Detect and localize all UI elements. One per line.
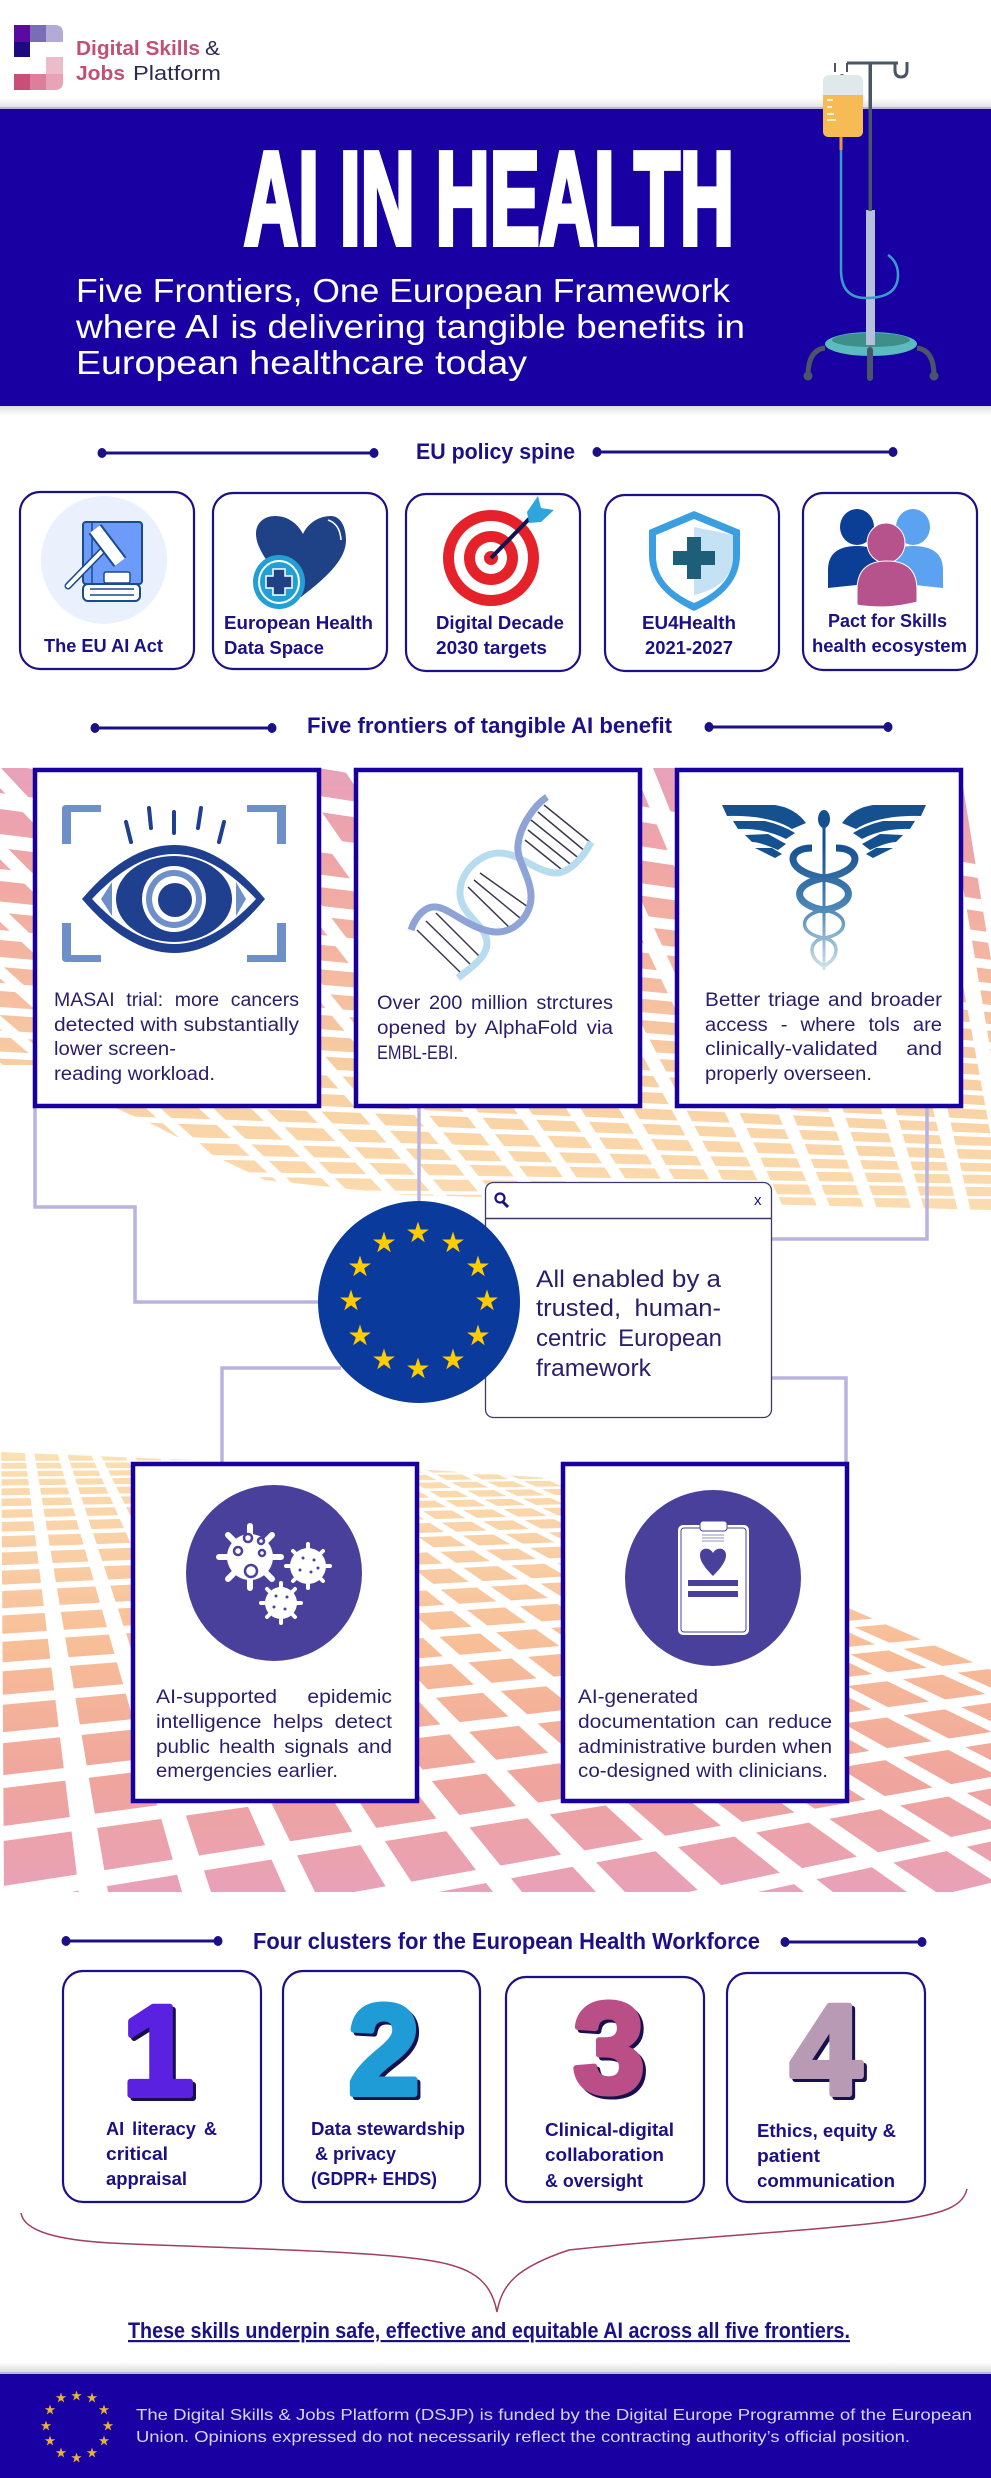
label: Pact for Skills bbox=[828, 610, 947, 631]
panel: triage and access bbox=[677, 770, 961, 1106]
panel: cluster 2 bbox=[283, 1971, 480, 2202]
label: AI literacy & bbox=[106, 2118, 217, 2139]
panel: European Health Data Space bbox=[213, 493, 387, 669]
heading: Four clusters for the European Health Workforce: Four clusters for the European Health Workforce bbox=[253, 1928, 760, 1954]
label: & oversight bbox=[545, 2170, 643, 2191]
logo wordmark: Platform bbox=[133, 63, 221, 85]
bottom tile pattern bbox=[1, 1452, 991, 1892]
conclusion line: These skills underpin safe, effective and equitable AI across all five frontiers. bbox=[128, 2318, 850, 2343]
label: (GDPR+ EHDS) bbox=[311, 2168, 437, 2189]
header band bbox=[0, 107, 991, 406]
icon: IV drip stand bbox=[804, 62, 938, 380]
logo wordmark: & bbox=[205, 38, 221, 60]
text bbox=[54, 990, 300, 1085]
panel: Pact for Skills health ecosystem bbox=[803, 493, 977, 670]
label bbox=[812, 610, 967, 656]
connectors: frontiers to EU framework bbox=[35, 1105, 927, 1464]
subtitle: European healthcare today bbox=[76, 344, 528, 381]
header shadow strips bbox=[0, 98, 991, 109]
label: Digital Decade bbox=[436, 612, 564, 633]
text: lower screen- bbox=[54, 1039, 176, 1060]
text bbox=[578, 1687, 832, 1782]
text: emergencies earlier. bbox=[156, 1761, 338, 1782]
label bbox=[311, 2118, 465, 2189]
close mark: x bbox=[754, 1192, 762, 1209]
disclaimer text: Union. Opinions expressed do not necessarily reflect the contracting authority’s official position. bbox=[136, 2429, 910, 2446]
icon: shield with cross bbox=[649, 511, 740, 611]
label: 2030 targets bbox=[436, 637, 547, 658]
panel: cluster 1 bbox=[63, 1971, 261, 2202]
text: AI-supported epidemic bbox=[156, 1687, 392, 1708]
icon: magnifier bbox=[496, 1194, 508, 1207]
text: trusted, human- bbox=[536, 1295, 721, 1322]
label: The EU AI Act bbox=[44, 635, 163, 656]
logo wordmark: Jobs bbox=[76, 63, 125, 85]
label: Data Space bbox=[224, 637, 324, 658]
text: administrative burden when bbox=[578, 1737, 832, 1758]
text: reading workload. bbox=[54, 1064, 215, 1085]
text: properly overseen. bbox=[705, 1064, 872, 1085]
icon: group of people bbox=[828, 509, 943, 607]
subtitle: Five Frontiers, One European Framework bbox=[76, 272, 731, 309]
panel: cluster 4 bbox=[727, 1973, 925, 2202]
text: MASAI trial: more cancers bbox=[54, 990, 299, 1011]
label: Ethics, equity & bbox=[757, 2120, 896, 2141]
text: intelligence helps detect bbox=[156, 1712, 393, 1733]
number 3: 3 bbox=[573, 1977, 645, 2120]
top tile pattern bbox=[0, 768, 991, 1210]
text: public health signals and bbox=[156, 1737, 392, 1758]
text: co-designed with clinicians. bbox=[578, 1761, 828, 1782]
disclaimer text: The Digital Skills & Jobs Platform (DSJP) is funded by the Digital Europe Programme of the European bbox=[136, 2407, 972, 2424]
brace connecting clusters to conclusion bbox=[21, 2189, 967, 2312]
icon: eye scan bbox=[62, 805, 286, 962]
text: Over 200 million strctures bbox=[377, 993, 613, 1014]
logo wordmark: Digital Skills bbox=[76, 38, 200, 60]
label: appraisal bbox=[106, 2168, 187, 2189]
text: centric European bbox=[536, 1325, 722, 1352]
label bbox=[106, 2118, 217, 2189]
callout: search-window framework box bbox=[485, 1182, 772, 1418]
text: AI-generated bbox=[578, 1687, 698, 1708]
text: Better triage and broader bbox=[705, 990, 943, 1011]
heading: Five frontiers of tangible AI benefit bbox=[90, 713, 892, 738]
disclaimer text bbox=[136, 2407, 972, 2446]
panel: MASAI trial bbox=[35, 770, 319, 1106]
label: patient bbox=[757, 2145, 820, 2166]
label: communication bbox=[757, 2170, 895, 2191]
heading: Four clusters for the European Health Workforce bbox=[62, 1928, 926, 1954]
panel: epidemic intelligence bbox=[133, 1464, 417, 1801]
text: detected with substantially bbox=[54, 1015, 300, 1036]
icon: clipboard with heart bbox=[625, 1490, 801, 1666]
label bbox=[642, 612, 736, 658]
subtitle: where AI is delivering tangible benefits in bbox=[75, 308, 745, 345]
number 4: 4 bbox=[790, 1979, 862, 2122]
label: collaboration bbox=[545, 2144, 664, 2165]
label bbox=[757, 2120, 896, 2191]
label: 2021-2027 bbox=[645, 637, 733, 658]
text: All enabled by a bbox=[536, 1266, 722, 1293]
text: documentation can reduce bbox=[578, 1712, 832, 1733]
text bbox=[156, 1687, 393, 1782]
logo: Digital Skills & Jobs Platform bbox=[14, 25, 221, 90]
footer band bbox=[0, 2362, 991, 2478]
label: critical bbox=[106, 2143, 168, 2164]
label: European Health bbox=[224, 612, 373, 633]
text: clinically-validated and bbox=[705, 1039, 942, 1060]
label: EU4Health bbox=[642, 612, 736, 633]
logo wordmark bbox=[76, 38, 221, 85]
icon: EU flag circle bbox=[318, 1201, 520, 1403]
label: health ecosystem bbox=[812, 635, 967, 656]
label: & privacy bbox=[315, 2143, 397, 2164]
text: opened by AlphaFold via bbox=[377, 1018, 613, 1039]
number 1: 1 bbox=[122, 1980, 194, 2123]
icon: caduceus bbox=[722, 805, 926, 970]
text: EMBL-EBI. bbox=[377, 1043, 458, 1064]
text bbox=[536, 1266, 722, 1382]
icon: EU stars bbox=[41, 2390, 113, 2462]
label: Data stewardship bbox=[311, 2118, 465, 2139]
label: Clinical-digital bbox=[545, 2119, 674, 2140]
text: access - where tols are bbox=[705, 1015, 942, 1036]
label bbox=[545, 2119, 674, 2191]
panel: The EU AI Act bbox=[20, 492, 194, 669]
heading: Five frontiers of tangible AI benefit: Five frontiers of tangible AI benefit bbox=[307, 713, 673, 738]
icon: viruses bbox=[186, 1485, 362, 1661]
subtitle bbox=[75, 272, 745, 381]
panel: AlphaFold bbox=[356, 770, 640, 1106]
label bbox=[224, 612, 373, 658]
icon: heart with cross badge bbox=[253, 516, 346, 609]
panel: Digital Decade 2030 targets bbox=[406, 494, 580, 671]
heading: EU policy spine: EU policy spine bbox=[416, 439, 575, 464]
text: framework bbox=[536, 1355, 652, 1382]
panel: AI documentation bbox=[563, 1464, 847, 1801]
number 2: 2 bbox=[348, 1979, 420, 2122]
label bbox=[436, 612, 564, 658]
text bbox=[705, 990, 943, 1085]
icon: target with dart bbox=[443, 496, 554, 606]
icon: DNA helix bbox=[411, 797, 591, 978]
icon: gavel and law book bbox=[41, 496, 167, 624]
icon: logo mosaic bbox=[14, 25, 63, 90]
heading: EU policy spine bbox=[98, 439, 898, 464]
text bbox=[377, 993, 613, 1064]
panel: EU4Health 2021-2027 bbox=[605, 495, 779, 671]
panel: cluster 3 bbox=[506, 1977, 704, 2202]
